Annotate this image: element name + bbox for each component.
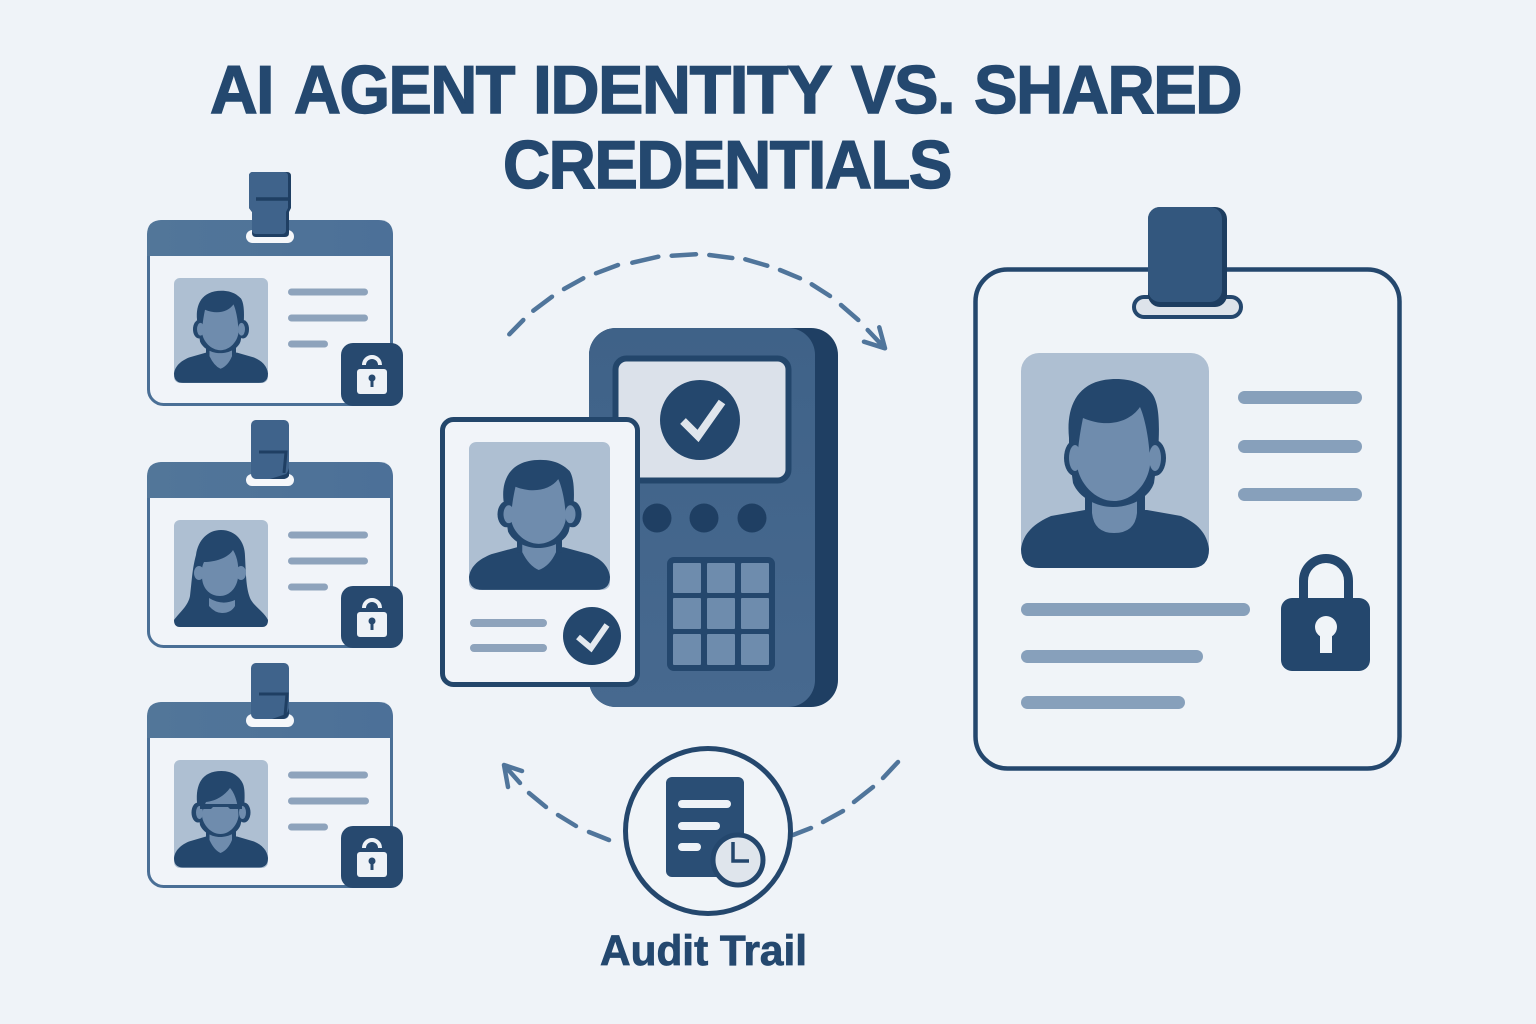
id photo — [469, 442, 610, 590]
badge body — [148, 222, 392, 404]
icon: lock — [341, 343, 403, 406]
title — [210, 52, 1241, 203]
icon: screen check — [660, 380, 740, 460]
badge header — [147, 702, 393, 738]
id photo: woman — [174, 520, 268, 627]
badge slot — [1134, 297, 1241, 317]
panel: shared badge 2 — [147, 420, 403, 648]
icon: padlock — [1281, 559, 1370, 671]
panel: access terminal — [589, 328, 838, 707]
title: VS. — [851, 52, 954, 128]
lower text lines — [1021, 603, 1250, 709]
badge body — [148, 704, 392, 886]
panel: audit trail — [600, 748, 807, 975]
status dots — [642, 504, 766, 532]
badge body — [148, 464, 392, 646]
id photo: man — [174, 278, 268, 383]
arrow: lower left dashed arc — [504, 765, 609, 840]
badge clip — [249, 172, 291, 237]
panel: individual agent identity badge — [976, 207, 1400, 768]
text lines — [470, 619, 547, 652]
card body — [442, 420, 638, 684]
badge slot — [246, 230, 294, 243]
badge clip — [1148, 207, 1227, 307]
panel: shared badge 3 — [147, 663, 403, 888]
icon: document — [666, 777, 744, 877]
text lines — [288, 772, 369, 830]
title: IDENTITY — [533, 52, 832, 128]
badge clip — [251, 420, 289, 479]
arrow: lower right dashed arc — [793, 762, 898, 835]
icon: card check — [563, 607, 621, 665]
icon: lock — [341, 586, 403, 648]
keypad — [667, 557, 775, 671]
text lines — [288, 288, 368, 348]
upper text lines — [1238, 391, 1362, 501]
id photo — [1021, 353, 1209, 568]
badge slot — [246, 714, 294, 727]
audit circle — [626, 748, 790, 914]
terminal front — [589, 328, 815, 707]
badge body — [976, 270, 1400, 768]
badge slot — [246, 474, 294, 486]
title: AI — [210, 52, 273, 128]
title: AGENT — [294, 52, 515, 128]
id photo: man with glasses — [174, 760, 268, 868]
badge header — [147, 462, 393, 498]
title: SHARED — [974, 52, 1241, 128]
icon: clock — [713, 835, 763, 885]
terminal screen — [616, 358, 788, 480]
audit trail label: Audit Trail — [600, 927, 807, 975]
arrow: top dashed arc — [509, 254, 885, 348]
icon: lock — [341, 826, 403, 888]
text lines — [288, 532, 368, 590]
badge header — [147, 220, 393, 256]
title: CREDENTIALS — [503, 127, 951, 203]
panel: verified agent card — [442, 420, 638, 684]
terminal side — [589, 328, 838, 707]
badge clip — [251, 663, 289, 719]
panel: shared badge 1 — [147, 172, 403, 406]
